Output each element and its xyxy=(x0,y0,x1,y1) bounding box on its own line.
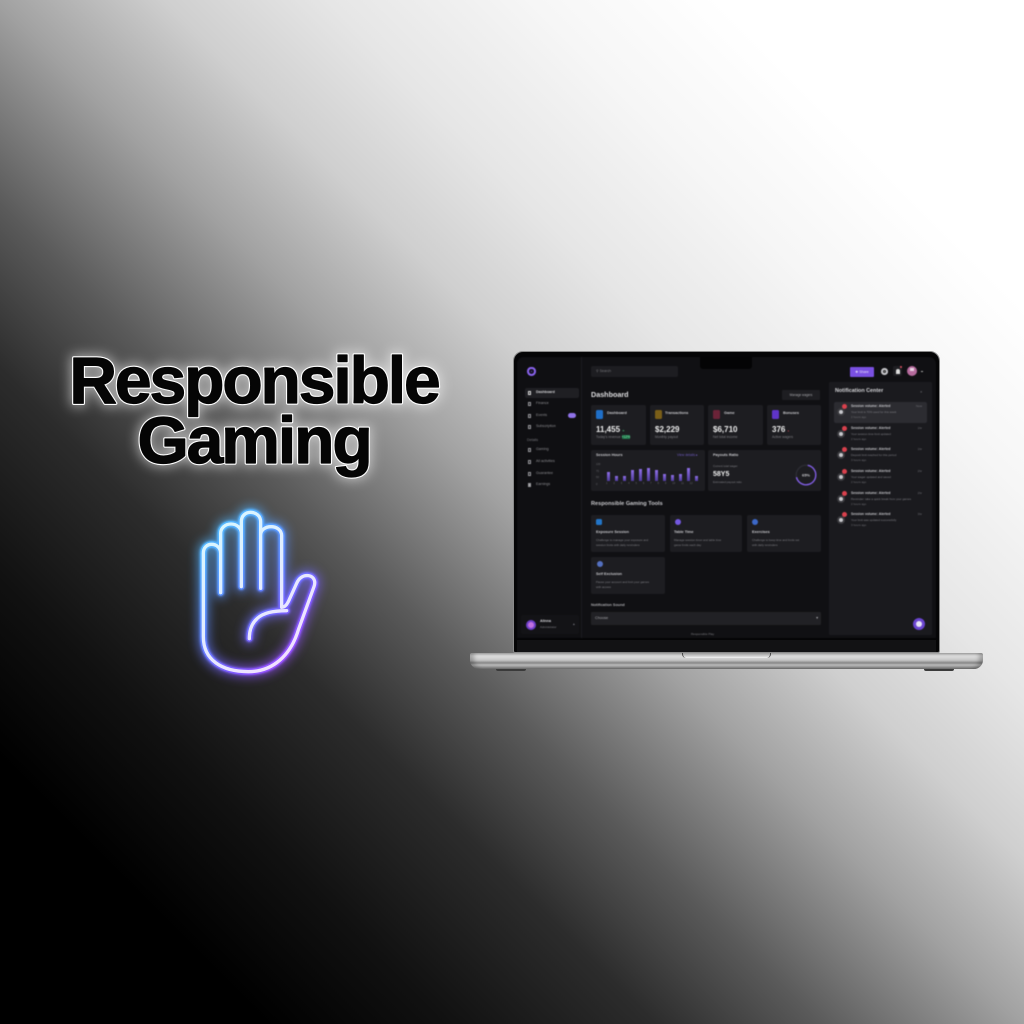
notification item 4: Your wager updated and saved xyxy=(851,475,891,479)
panel caption: Current total wager xyxy=(713,464,738,468)
notification item 3: 3 hours ago xyxy=(851,458,866,462)
floating action button xyxy=(913,618,925,630)
panel note: Estimated payout ratio xyxy=(713,480,742,484)
stat value: $6,710 xyxy=(713,425,737,434)
tool text: Pause your account and limit your games xyxy=(596,580,649,584)
stat card: games xyxy=(708,405,763,445)
tool title: Exercises xyxy=(752,530,770,534)
stat card: bonuses xyxy=(767,405,821,445)
stat label: Game xyxy=(724,411,735,415)
tool text: Challenge to keep time and limits set xyxy=(752,538,799,542)
trackpad notch xyxy=(682,653,771,658)
sidebar navigation: Events xyxy=(536,413,547,417)
tool title: Exposure Session xyxy=(596,530,629,534)
footer text: Responsible Play xyxy=(691,632,714,636)
notification sound select: ▾ xyxy=(816,616,818,620)
bar chart panel xyxy=(591,450,705,491)
user caret xyxy=(921,371,923,372)
sidebar active item xyxy=(525,388,579,398)
panel value: 58Y5 xyxy=(713,471,729,478)
stat icon xyxy=(713,410,720,419)
tool text: session limits with daily reminders xyxy=(596,543,640,547)
camera notch xyxy=(700,357,752,369)
sidebar navigation: Dashboard xyxy=(536,390,555,394)
notification item 1: Now xyxy=(916,404,922,408)
tool card: table xyxy=(670,515,742,552)
notification item 3 xyxy=(836,446,922,462)
laptop base xyxy=(470,653,983,669)
notification sound label: Notification Sound xyxy=(591,603,625,607)
title: Gaming xyxy=(137,403,371,477)
sidebar navigation: Earnings xyxy=(536,482,550,486)
sidebar navigation: Guarantee xyxy=(536,471,553,475)
notification item 2: Your session time limit updated xyxy=(851,432,891,436)
stat label: Dashboard xyxy=(607,411,627,415)
stat value: 376 • xyxy=(772,425,789,434)
notification item 1 xyxy=(838,403,922,419)
sidebar navigation: Details xyxy=(527,438,538,442)
notification item 6: Session volume: Alerted xyxy=(851,512,890,516)
title: Gaming xyxy=(137,403,371,477)
notification item 5 xyxy=(836,490,922,506)
stat icon xyxy=(772,410,779,419)
notification bell icon xyxy=(893,366,902,376)
stat note: Today's revenue +12% xyxy=(596,435,630,439)
notification sound select xyxy=(591,612,821,625)
chart y axis: 100 75 50 0 xyxy=(596,463,600,486)
sidebar navigation: Finance xyxy=(536,401,549,405)
tool card: self exclusion xyxy=(591,557,665,594)
account role: Administrator xyxy=(540,625,556,629)
notification item 4: 2 hours ago xyxy=(851,480,866,484)
search field: ⚲ Search xyxy=(596,368,611,372)
notification item 6: 3hr xyxy=(918,512,922,516)
donut gauge xyxy=(795,464,818,486)
notification item 5: Reminder: take a quick break from your games xyxy=(851,497,911,501)
notification close: × xyxy=(920,389,922,394)
stat icon xyxy=(596,410,603,419)
tool icon xyxy=(596,519,602,525)
upgrade button xyxy=(850,367,874,377)
stat card: dashboard xyxy=(591,405,646,445)
stat label: Bonuses xyxy=(783,411,799,415)
notification item 5: 2 hours ago xyxy=(851,502,866,506)
laptop xyxy=(470,351,983,671)
dashboard action button xyxy=(782,390,820,400)
app background xyxy=(517,357,936,638)
notification item 1: Your limit is 70% used for this week xyxy=(851,410,896,414)
laptop feet xyxy=(496,669,526,671)
title: Responsible xyxy=(69,343,439,417)
stat value: 11,455 + xyxy=(596,425,625,434)
chart title: Session Hours xyxy=(596,453,623,457)
sidebar badge xyxy=(568,413,576,418)
notification heading: Notification Center xyxy=(835,388,883,394)
notification item 1: Session volume: Alerted xyxy=(851,404,890,408)
sidebar navigation xyxy=(526,390,556,488)
chart link: View details ▸ xyxy=(677,453,698,457)
dashboard heading: Dashboard xyxy=(591,390,629,399)
account name: Alinna xyxy=(540,619,551,623)
search field xyxy=(591,366,678,377)
upgrade button: ✚ Share xyxy=(855,370,869,374)
notification item 6 xyxy=(836,511,922,527)
title: Responsible xyxy=(69,343,439,417)
sidebar account xyxy=(521,615,579,634)
screen bezel xyxy=(513,351,940,653)
chart bars xyxy=(606,467,699,482)
tool text: with access xyxy=(596,585,611,589)
chart x axis: 1 2 3 4 5 6 7 8 9 10 11 12 xyxy=(606,482,693,485)
notification item 2: 1hr xyxy=(918,426,922,430)
notification item 4 xyxy=(836,468,922,484)
logo xyxy=(527,367,536,376)
title: Gaming xyxy=(137,403,371,477)
title xyxy=(62,343,446,486)
donut gauge: 65% xyxy=(802,472,810,477)
tools heading: Responsible Gaming Tools xyxy=(591,501,663,507)
notification item 2 xyxy=(836,425,922,441)
tool card: exposure xyxy=(591,515,665,552)
stat note: Monthly payout xyxy=(655,435,678,439)
icon: neon raised hand xyxy=(190,500,327,685)
notification item 2: Session volume: Alerted xyxy=(851,426,890,430)
sidebar xyxy=(517,357,582,638)
tool text xyxy=(596,580,650,589)
notification item 5: 2hr xyxy=(918,491,922,495)
tool title: Self Exclusion xyxy=(596,572,622,576)
sidebar navigation: All activities xyxy=(536,459,555,463)
tool text: game limits each day xyxy=(674,543,701,547)
sidebar navigation: Subscription xyxy=(536,424,556,428)
tool text xyxy=(596,538,648,547)
notification item 3: Deposit limit reached for this period xyxy=(851,453,896,457)
account avatar xyxy=(526,620,536,630)
tool text: Manage session timer and table time xyxy=(674,538,721,542)
tool icon xyxy=(597,561,603,567)
notification center panel xyxy=(829,382,932,635)
stat note: Net total income xyxy=(713,435,738,439)
tool card: exercise xyxy=(747,515,821,552)
user avatar xyxy=(907,366,917,376)
notification item 1: 2 hours ago xyxy=(851,415,866,419)
dashboard action button: Manage wagers xyxy=(790,393,812,397)
tool icon xyxy=(675,519,681,525)
tool text: with daily reminders xyxy=(752,543,778,547)
sidebar navigation: Gaming xyxy=(536,447,549,451)
performance panel xyxy=(708,450,821,491)
tool text xyxy=(674,538,722,547)
stat label: Transactions xyxy=(665,411,688,415)
account caret: ▴ xyxy=(573,622,575,626)
tool title: Table Time xyxy=(674,530,693,534)
tool text: Challenge to manage your exposure and xyxy=(596,538,648,542)
notification item 5: Session volume: Alerted xyxy=(851,491,890,495)
notification item 6: Your limit was updated successfully xyxy=(851,518,896,522)
notification highlight xyxy=(834,402,927,423)
settings icon xyxy=(881,368,888,375)
tool text xyxy=(752,538,800,547)
notification item 4: 2hr xyxy=(918,469,922,473)
stat value: $2,229 xyxy=(655,425,679,434)
panel title: Payouts Ratio xyxy=(713,453,738,457)
notification item 3: Session volume: Alerted xyxy=(851,447,890,451)
notification item 4: Session volume: Alerted xyxy=(851,469,890,473)
bezel lower band xyxy=(517,640,936,652)
title: Responsible xyxy=(69,343,439,417)
stat note: Active wagers xyxy=(772,435,793,439)
stat card: transactions xyxy=(650,405,704,445)
notification item 3: 1hr xyxy=(918,447,922,451)
notification item 6: 3 hours ago xyxy=(851,523,866,527)
stat icon xyxy=(655,410,662,419)
notification item 2: 2 hours ago xyxy=(851,437,866,441)
tool icon xyxy=(752,519,758,525)
notification sound select: Choose xyxy=(595,616,608,620)
